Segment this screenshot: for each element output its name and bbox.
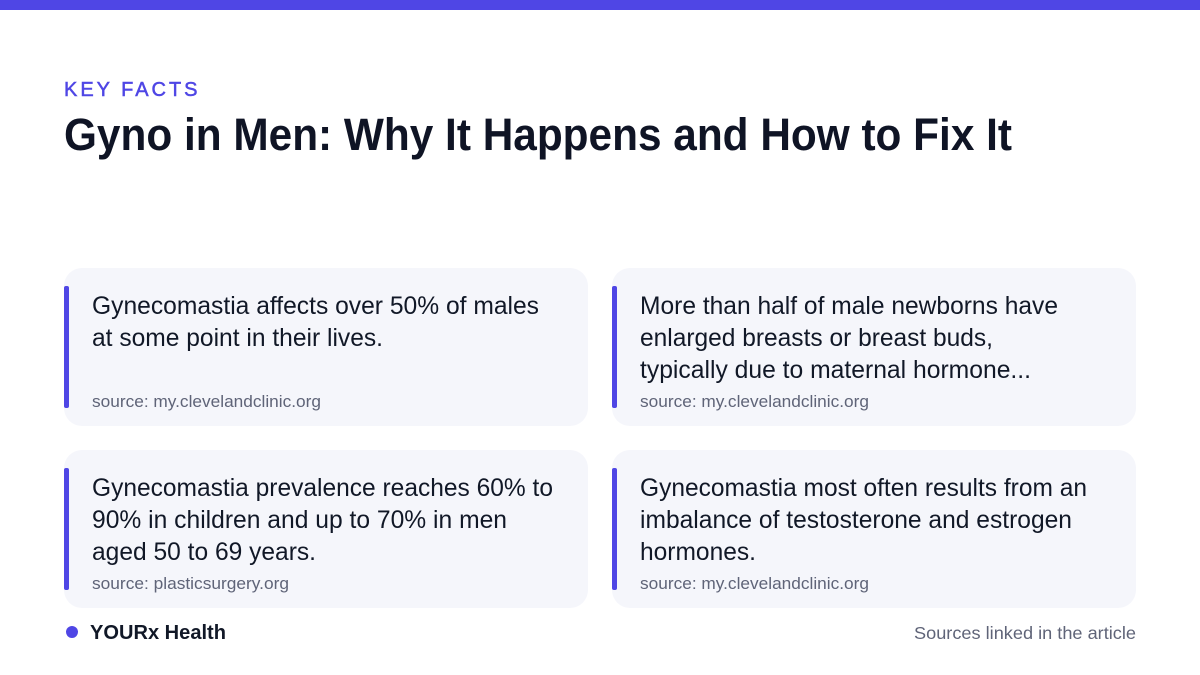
panel: fact 2 bbox=[612, 268, 1136, 426]
accent bar: fact 1 bbox=[64, 286, 69, 408]
panel: fact 3 bbox=[64, 450, 588, 608]
fact 1 text: Gynecomastia affects over 50% of males bbox=[92, 292, 539, 320]
accent bar: fact 2 bbox=[612, 286, 617, 408]
fact 3 source: source: plasticsurgery.org bbox=[92, 575, 289, 593]
fact 3 text: aged 50 to 69 years. bbox=[92, 538, 316, 566]
panel: fact 4 bbox=[612, 450, 1136, 608]
fact 4 source: source: my.clevelandclinic.org bbox=[640, 575, 869, 593]
fact 2 text bbox=[640, 292, 1058, 384]
top accent bar bbox=[0, 0, 1200, 10]
fact 1 text: at some point in their lives. bbox=[92, 324, 383, 352]
accent bar: fact 4 bbox=[612, 468, 617, 590]
brand name: YOURx Health bbox=[90, 622, 226, 644]
fact 3 text bbox=[92, 474, 553, 566]
fact 3 text: 90% in children and up to 70% in men bbox=[92, 506, 507, 534]
fact 2 source: source: my.clevelandclinic.org bbox=[640, 393, 869, 411]
eyebrow: key facts: KEY FACTS bbox=[64, 79, 198, 101]
panel: fact 1 bbox=[64, 268, 588, 426]
fact 2 text: More than half of male newborns have bbox=[640, 292, 1058, 320]
fact 4 text: hormones. bbox=[640, 538, 756, 566]
fact 1 text bbox=[92, 292, 539, 352]
fact 1 source: source: my.clevelandclinic.org bbox=[92, 393, 321, 411]
sources note: Sources linked in the article bbox=[914, 623, 1136, 643]
fact 3 text: Gynecomastia prevalence reaches 60% to bbox=[92, 474, 553, 502]
brand dot bbox=[66, 626, 78, 638]
title: Gyno in Men: Why It Happens and How to Fix It bbox=[64, 109, 1012, 160]
fact 4 text bbox=[640, 474, 1087, 566]
fact 4 text: Gynecomastia most often results from an bbox=[640, 474, 1087, 502]
fact 2 text: typically due to maternal hormone... bbox=[640, 356, 1031, 384]
fact 2 text: enlarged breasts or breast buds, bbox=[640, 324, 993, 352]
accent bar: fact 3 bbox=[64, 468, 69, 590]
fact 4 text: imbalance of testosterone and estrogen bbox=[640, 506, 1072, 534]
